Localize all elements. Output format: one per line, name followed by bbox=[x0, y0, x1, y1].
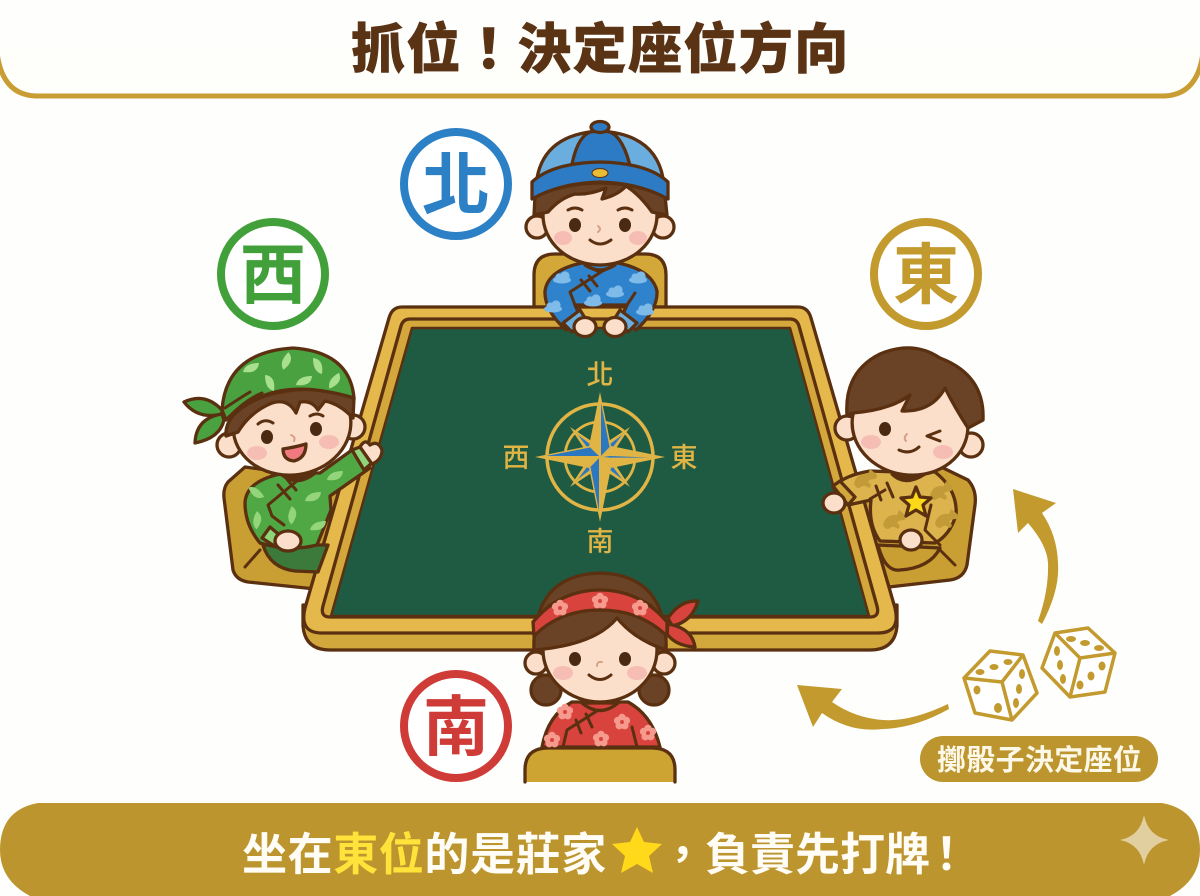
character: south girl in red bbox=[525, 573, 698, 782]
ears bbox=[217, 433, 241, 457]
bandana bbox=[222, 348, 354, 420]
direction badge: south: 南 bbox=[423, 690, 489, 764]
direction badge: north bbox=[404, 132, 508, 236]
face bbox=[227, 367, 357, 483]
hair bbox=[847, 348, 983, 428]
headband tails bbox=[668, 601, 698, 626]
ears bbox=[835, 416, 859, 440]
star icon bbox=[612, 827, 662, 873]
direction badge: north: 北 bbox=[422, 148, 490, 224]
dice caption pill: 擲骰子決定座位 bbox=[937, 744, 1142, 777]
hair buns bbox=[531, 675, 561, 705]
face details bbox=[879, 422, 891, 436]
sparkle bbox=[1120, 815, 1169, 865]
face bbox=[543, 598, 657, 702]
direction badge: west bbox=[221, 222, 325, 326]
ears bbox=[525, 652, 547, 674]
face details bbox=[568, 208, 632, 210]
title: 抓位！決定座位方向 bbox=[351, 19, 850, 80]
table top frame bbox=[304, 307, 896, 633]
arrow: toward east bbox=[1013, 489, 1058, 624]
fringe bbox=[534, 600, 666, 650]
character: north boy in blue bbox=[526, 122, 674, 336]
character: east boy in gold bbox=[823, 348, 983, 570]
direction badge: east bbox=[874, 222, 978, 326]
chair: west bbox=[224, 467, 340, 590]
arrow: toward south bbox=[797, 685, 949, 730]
compass label: south: 南 bbox=[586, 527, 614, 557]
hat band bbox=[532, 162, 668, 199]
robe bbox=[542, 702, 660, 747]
chair: east bbox=[860, 465, 975, 587]
face bbox=[543, 165, 657, 265]
hair bbox=[226, 389, 354, 436]
green felt bbox=[331, 328, 869, 616]
bandana knot bbox=[184, 398, 222, 416]
face bbox=[846, 367, 974, 483]
compass label: west: 西 bbox=[502, 443, 530, 473]
dice caption pill bbox=[920, 736, 1158, 782]
chair: north bbox=[534, 254, 666, 307]
footer message: 坐在東位的是莊家 bbox=[242, 829, 607, 880]
cuffs and hands bbox=[833, 481, 855, 505]
chair bbox=[525, 748, 675, 782]
character: west boy in green bbox=[184, 348, 382, 572]
face details bbox=[258, 414, 323, 424]
die two bbox=[1042, 628, 1115, 697]
header banner bbox=[0, 19, 1200, 96]
robe bbox=[545, 263, 657, 330]
star badge bbox=[901, 487, 931, 516]
footer banner bbox=[0, 803, 1200, 896]
die one bbox=[964, 651, 1037, 720]
compass label: north: 北 bbox=[586, 360, 614, 390]
robe bbox=[833, 471, 956, 543]
footer message continued: ，負責先打牌！ bbox=[660, 829, 969, 880]
cuffs and hands bbox=[352, 447, 373, 470]
inner ledge bbox=[322, 319, 878, 617]
trousers bbox=[263, 545, 328, 572]
direction badge: east: 東 bbox=[893, 238, 959, 312]
robe bbox=[245, 450, 370, 548]
hat dome bbox=[537, 131, 663, 178]
hair bbox=[534, 183, 667, 215]
compass label: east: 東 bbox=[670, 443, 698, 473]
headband bbox=[533, 590, 667, 636]
mahjong table bbox=[303, 307, 897, 650]
direction badge: south bbox=[404, 674, 508, 778]
dice bbox=[964, 628, 1115, 720]
compass rose bbox=[535, 392, 665, 522]
direction badge: west: 西 bbox=[240, 238, 306, 312]
ears bbox=[526, 216, 548, 238]
cuffs and hands bbox=[563, 310, 585, 332]
table side bbox=[303, 605, 897, 650]
face details bbox=[569, 652, 581, 666]
hair dome bbox=[535, 573, 665, 655]
trousers bbox=[878, 545, 940, 570]
